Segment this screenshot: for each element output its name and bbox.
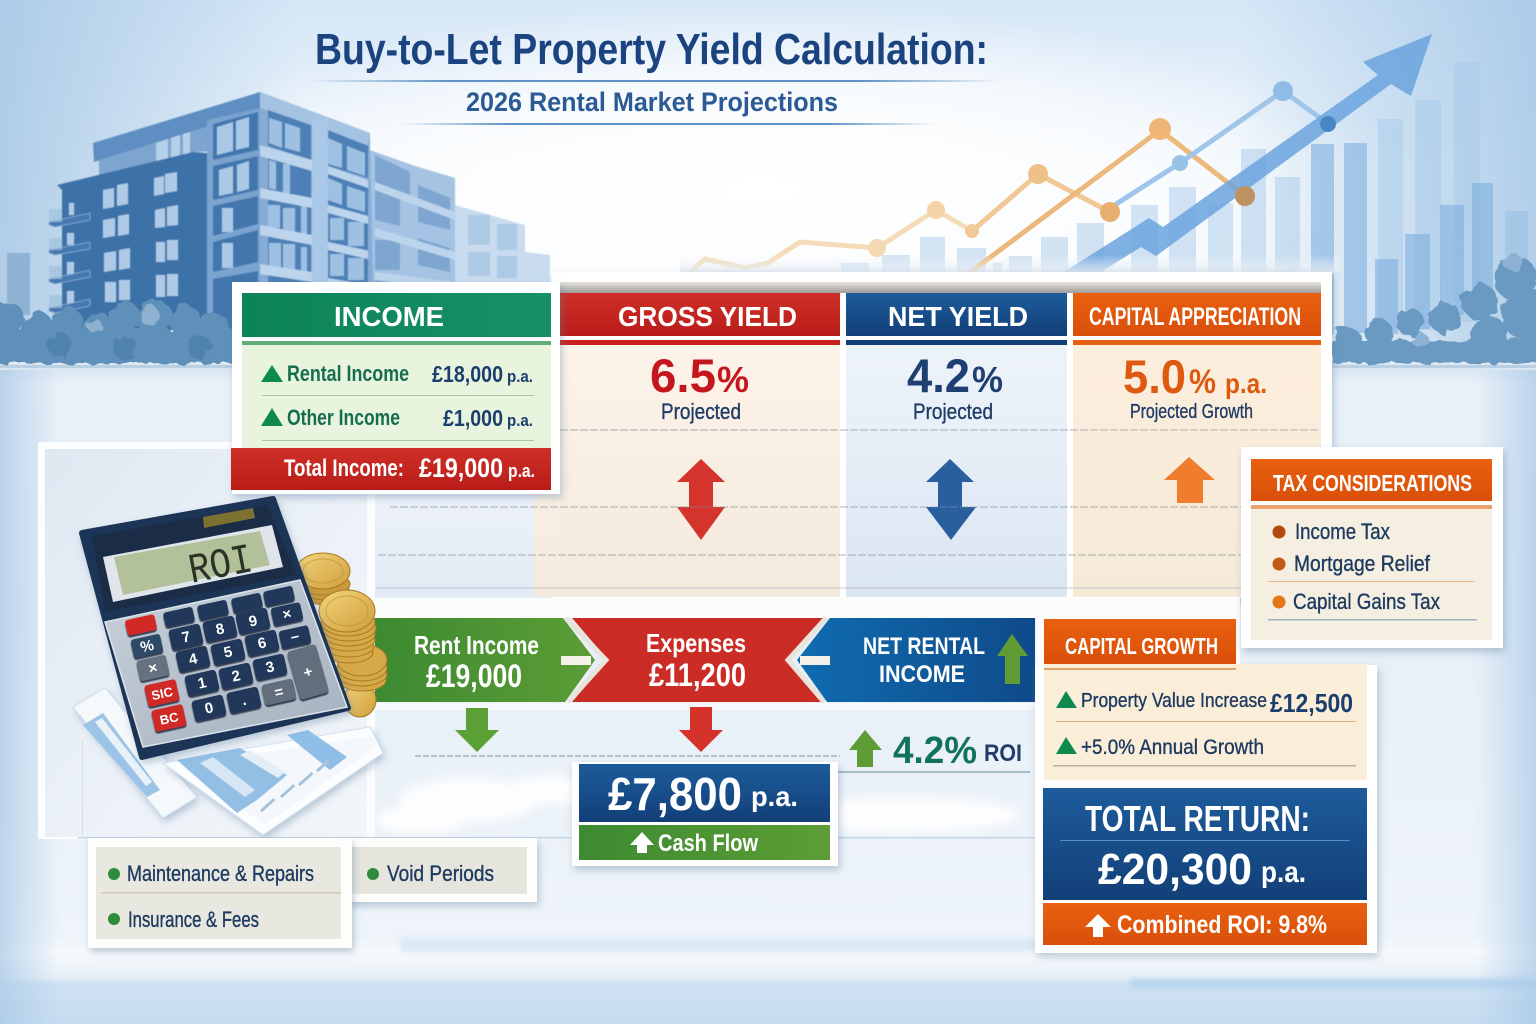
- total return: £20,300: [1098, 845, 1252, 894]
- income header: [242, 293, 551, 337]
- keys: =: [273, 683, 285, 702]
- net amount: p.a.: [751, 781, 798, 812]
- tax header: [1251, 459, 1492, 501]
- title: [308, 25, 1000, 125]
- keys: .: [240, 692, 248, 709]
- lower stack: [337, 644, 387, 691]
- rental income row: £18,000: [432, 361, 503, 387]
- flow step: expenses: [572, 618, 823, 702]
- keys: 7: [180, 628, 192, 647]
- cash flow label: [579, 825, 830, 860]
- flow step: rent income: [375, 618, 595, 702]
- top coin: [296, 553, 350, 589]
- right face: [260, 92, 374, 330]
- card: void periods: Void Periods: [387, 861, 494, 886]
- arrow: rent income down: [455, 708, 499, 752]
- trees and horizon, right: [1332, 253, 1536, 363]
- net amount: £7,800: [608, 768, 742, 820]
- card: void periods: [345, 838, 537, 902]
- total return: p.a.: [1261, 856, 1306, 889]
- keys: 8: [214, 620, 226, 639]
- keys: 0: [203, 699, 215, 718]
- keys: SIC: [150, 684, 175, 703]
- white strip behind flow row: [375, 598, 1240, 710]
- column: capital appreciation: 5.0: [1123, 350, 1186, 403]
- flow step: net rental income: [797, 618, 1035, 702]
- combined ROI: [1043, 903, 1367, 945]
- callout: 4.2% ROI: ROI: [984, 740, 1022, 767]
- upper small stack: [298, 573, 350, 605]
- silver keypad face: [105, 580, 347, 747]
- paper small print: [260, 759, 330, 812]
- callout: 4.2% ROI: [838, 730, 1030, 773]
- right face glass: [268, 118, 365, 280]
- mid glass: [217, 117, 249, 268]
- capital growth header: CAPITAL GROWTH: [1065, 633, 1218, 659]
- paper blue tab: [287, 730, 347, 770]
- flow step: net rental income: NET RENTAL: [863, 633, 985, 660]
- other income row: £1,000: [443, 405, 503, 431]
- dashed guide lines: [376, 430, 1320, 588]
- left face glass: [67, 172, 178, 304]
- keys: 9: [247, 612, 259, 631]
- column: gross yield: [560, 293, 840, 597]
- column: capital appreciation: CAPITAL APPRECIATION: [1089, 303, 1301, 331]
- mid frame: [207, 108, 260, 330]
- middle wing: [370, 150, 455, 330]
- panel: yield columns: [375, 272, 1332, 598]
- capital growth body: Property Value Increase: [1081, 690, 1267, 712]
- flow step: expenses: £11,200: [649, 657, 746, 693]
- connector arrow: green to red: [561, 618, 606, 702]
- net amount: [579, 764, 830, 822]
- keys: 2: [230, 667, 242, 686]
- capital growth body: [1044, 664, 1367, 780]
- total income bar: £19,000: [419, 453, 503, 483]
- column: net yield: NET YIELD: [888, 301, 1028, 332]
- trend lines: [690, 91, 1327, 274]
- rental income row: [261, 361, 533, 387]
- balconies: [49, 213, 90, 313]
- capital growth header: [1044, 619, 1236, 670]
- floor ledges, right face: [260, 145, 455, 293]
- bottom coin: [344, 683, 376, 717]
- keys: 6: [256, 634, 268, 653]
- panel: income: [231, 282, 560, 494]
- screen text: ROI: [185, 536, 257, 596]
- card: maintenance and insurance: Insurance & Fees: [128, 907, 259, 932]
- column: gross yield: GROSS YIELD: [618, 301, 797, 332]
- connector arrow: blue to red: [788, 618, 830, 702]
- other income row: p.a.: [507, 411, 533, 430]
- column: gross yield: %: [717, 359, 749, 400]
- total return: [1043, 788, 1367, 900]
- flow step: net rental income: INCOME: [879, 661, 965, 688]
- main coin: [319, 590, 375, 632]
- keys: 5: [222, 643, 234, 662]
- other income row: Other Income: [287, 405, 400, 430]
- keys: +: [302, 663, 315, 682]
- capital growth body: +5.0% Annual Growth: [1081, 736, 1264, 759]
- darker bars: [1311, 143, 1528, 334]
- panel: capital growth and total return: [1035, 598, 1377, 953]
- callout: 4.2% ROI: 4.2%: [893, 730, 977, 772]
- screen: [114, 531, 270, 595]
- flow step: rent income: Rent Income: [414, 630, 539, 660]
- total return: TOTAL RETURN:: [1085, 798, 1310, 839]
- left block: [57, 152, 207, 330]
- keys: −: [289, 628, 301, 647]
- mid panels: [213, 112, 258, 330]
- card: maintenance and insurance: Maintenance & Repairs: [127, 861, 314, 886]
- horizon haze: [680, 255, 1340, 273]
- rental income row: Rental Income: [287, 361, 409, 386]
- keys: ×: [147, 659, 159, 678]
- icon: calculator: [82, 499, 348, 757]
- keys: %: [139, 637, 155, 656]
- card: maintenance and insurance: [88, 838, 352, 948]
- rule above expense cards: [78, 837, 1035, 838]
- solar panel: [203, 508, 255, 528]
- illustration: papers under calculator: [73, 688, 383, 835]
- flow step: rent income: £19,000: [426, 658, 522, 694]
- rental income row: p.a.: [507, 367, 533, 386]
- keys: BC: [158, 709, 180, 728]
- keys: 1: [196, 674, 208, 693]
- capital growth body: £12,500: [1270, 688, 1353, 718]
- column: net yield: 4.2: [907, 349, 970, 402]
- tax item: mortgage relief: Mortgage Relief: [1294, 551, 1431, 576]
- panel: cash flow result: [572, 762, 838, 866]
- column: gross yield: Projected: [661, 399, 741, 424]
- column: gross yield: 6.5: [650, 349, 716, 402]
- panel: expense items: [88, 838, 537, 948]
- line markers: [868, 81, 1336, 257]
- panel: tax considerations: [1241, 447, 1503, 648]
- pale bars: [841, 62, 1480, 330]
- paper chart band: [177, 748, 287, 813]
- keys: [125, 585, 329, 732]
- flow: income to net: [375, 618, 1035, 702]
- left paper: [73, 688, 197, 818]
- background chart: bars and growth lines: [680, 34, 1528, 334]
- column: capital appreciation: %: [1189, 363, 1216, 401]
- keys: 4: [187, 650, 200, 669]
- soft clouds: [375, 776, 1020, 834]
- total income bar: Total Income:: [284, 455, 404, 482]
- far wing: [455, 205, 550, 285]
- column: capital appreciation: [1073, 293, 1321, 597]
- cash flow label: Cash Flow: [658, 830, 758, 857]
- main heading: Buy-to-Let Property Yield Calculation:: [315, 25, 988, 74]
- panel: tax considerations: TAX CONSIDERATIONS: [1273, 470, 1472, 496]
- blue growth arrow: [1064, 34, 1432, 272]
- arrow: expenses down: [679, 707, 723, 752]
- column: net yield: Projected: [913, 399, 993, 424]
- column: net yield: %: [972, 359, 1003, 400]
- recessed window bays: [268, 110, 368, 330]
- apartment building illustration: [7, 92, 550, 330]
- roof band and top floor: [93, 92, 260, 162]
- keys: ×: [281, 605, 293, 624]
- total income bar: p.a.: [508, 461, 535, 481]
- other income row: [261, 405, 533, 431]
- dashed line under flow: [415, 755, 840, 757]
- distant tower: [7, 253, 30, 315]
- combined ROI: Combined ROI: 9.8%: [1117, 911, 1327, 939]
- tax item: capital gains tax: Capital Gains Tax: [1293, 589, 1440, 614]
- panel: income: INCOME: [334, 301, 444, 332]
- tax item: income tax: Income Tax: [1295, 519, 1390, 544]
- main paper: [163, 727, 383, 835]
- column: net yield: [846, 293, 1067, 597]
- inner top plate: [92, 505, 297, 612]
- trees and horizon, left: [0, 300, 240, 363]
- column: capital appreciation: Projected Growth: [1130, 401, 1253, 423]
- total income bar: [231, 448, 551, 490]
- column: capital appreciation: p.a.: [1225, 368, 1267, 399]
- flow step: expenses: Expenses: [646, 628, 746, 658]
- main stack: [321, 608, 376, 663]
- subtitle: 2026 Rental Market Projections: [466, 87, 838, 117]
- keys: 3: [264, 658, 276, 677]
- icon: gold coins: [296, 553, 387, 717]
- display frame: [103, 525, 283, 602]
- calculator body: [82, 499, 348, 757]
- panel: calculator backdrop: [38, 442, 375, 839]
